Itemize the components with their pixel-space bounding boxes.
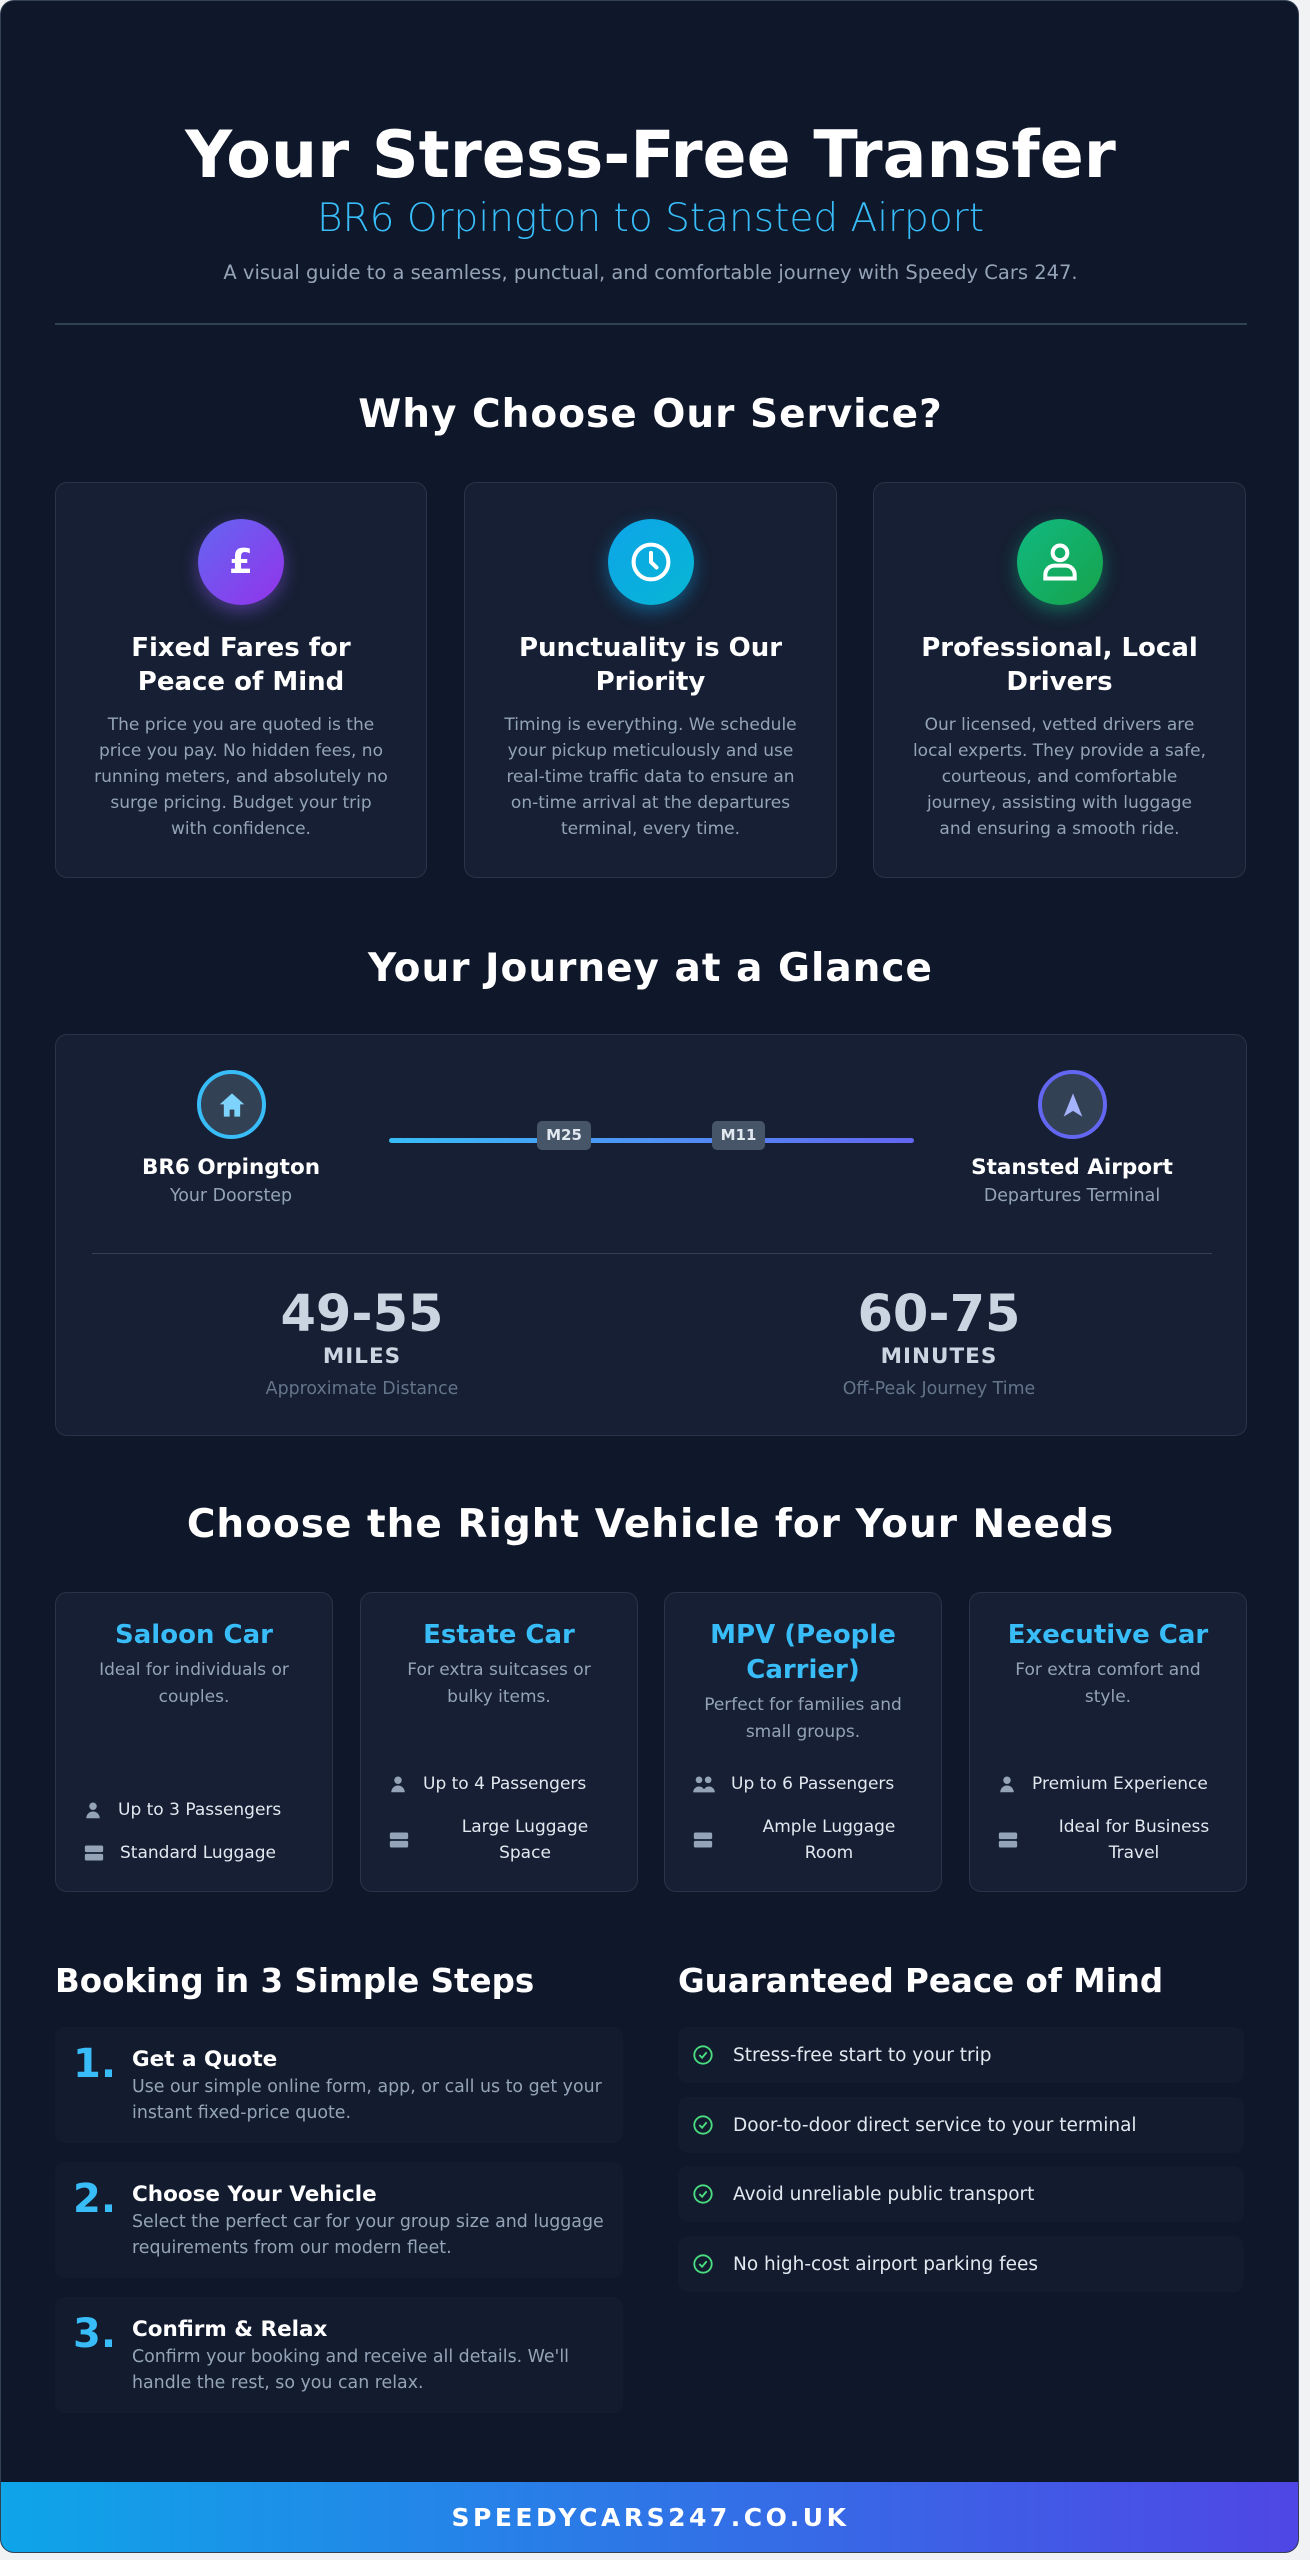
panel: estate xyxy=(360,1592,638,1892)
badge M11 xyxy=(712,1121,765,1150)
panel: mpv: MPV (People xyxy=(710,1620,896,1650)
feature: premium: Premium Experience xyxy=(1032,1774,1208,1794)
icon: person xyxy=(1016,519,1102,605)
stat: distance xyxy=(266,1285,458,1399)
feature: passengers: Up to 6 Passengers xyxy=(731,1774,894,1794)
benefit 4: No high-cost airport parking fees xyxy=(733,2254,1038,2274)
panel: punctuality xyxy=(464,482,837,878)
heading: vehicles: Choose the Right Vehicle for Your Needs xyxy=(187,1502,1114,1547)
stat: distance: MILES xyxy=(323,1344,401,1369)
icon: plane xyxy=(1038,1070,1107,1139)
feature: luggage xyxy=(390,1817,588,1863)
step 2: Select the perfect car for your group size and luggage requirements from our modern fleet. xyxy=(132,2212,604,2258)
stat: time: Off-Peak Journey Time xyxy=(843,1379,1035,1399)
step 2 xyxy=(55,2162,623,2278)
step 3: Confirm & Relax xyxy=(132,2317,327,2342)
benefit 2 xyxy=(678,2097,1244,2153)
benefit 3: Avoid unreliable public transport xyxy=(733,2184,1034,2204)
destination label: Stansted Airport xyxy=(971,1155,1173,1180)
stat: time: MINUTES xyxy=(881,1344,997,1369)
card title: Priority xyxy=(596,667,705,697)
footer: SPEEDYCARS247.CO.UK xyxy=(452,2503,849,2532)
benefit 2: Door-to-door direct service to your terminal xyxy=(733,2114,1137,2136)
feature: luggage: Large Luggage xyxy=(462,1817,588,1837)
feature: passengers: Up to 4 Passengers xyxy=(423,1774,586,1794)
stat: distance: Approximate Distance xyxy=(266,1379,458,1399)
feature: business: Ideal for Business xyxy=(1059,1817,1209,1837)
heading: booking: Booking in 3 Simple Steps xyxy=(55,1962,534,2000)
panel: executive: Executive Car xyxy=(1008,1620,1208,1650)
card title: Punctuality is Our xyxy=(519,633,782,663)
card title xyxy=(519,633,782,697)
panel: estate: For extra suitcases or bulky items. xyxy=(407,1660,591,1707)
panel: saloon xyxy=(55,1592,333,1892)
destination label: Departures Terminal xyxy=(984,1186,1160,1206)
stat: time: 60-75 xyxy=(857,1285,1021,1344)
feature: passengers: Up to 3 Passengers xyxy=(118,1800,281,1820)
feature: luggage: Ample Luggage xyxy=(763,1817,895,1837)
icon: pound xyxy=(198,519,284,605)
destination label xyxy=(971,1155,1173,1206)
panel: mpv: Carrier) xyxy=(746,1655,860,1685)
panel: journey xyxy=(55,1034,1247,1436)
panel: mpv xyxy=(664,1592,942,1892)
origin label: BR6 Orpington xyxy=(142,1155,320,1180)
card text: Timing is everything. We schedule your pickup meticulously and use real-time traffic data to ensure an on-time arrival at the departures terminal, every time. xyxy=(504,715,797,839)
icon: home xyxy=(197,1070,266,1139)
step 1: 1. xyxy=(73,2041,116,2087)
title: Your Stress-Free Transfer xyxy=(185,118,1116,193)
badge M25 xyxy=(537,1121,591,1150)
card title xyxy=(921,633,1198,697)
footer xyxy=(1,2482,1300,2554)
feature: luggage: Room xyxy=(805,1843,853,1863)
card title xyxy=(131,633,351,697)
panel: saloon: Ideal for individuals or couples. xyxy=(99,1660,289,1707)
step 3: 3. xyxy=(73,2311,116,2357)
panel: executive xyxy=(969,1592,1247,1892)
benefit 3 xyxy=(678,2166,1244,2222)
stat: distance: 49-55 xyxy=(280,1285,444,1344)
card title: Drivers xyxy=(1006,667,1113,697)
card text: Our licensed, vetted drivers are local experts. They provide a safe, courteous, and comfortable journey, assisting with luggage and ensuring a smooth ride. xyxy=(913,715,1206,839)
benefit 1 xyxy=(678,2027,1244,2083)
panel: mpv: Perfect for families and small groups. xyxy=(704,1695,902,1742)
benefit 1: Stress-free start to your trip xyxy=(733,2044,992,2066)
heading: journey: Your Journey at a Glance xyxy=(368,946,933,991)
badge M25: M25 xyxy=(546,1126,582,1144)
step 1: Get a Quote xyxy=(132,2047,277,2072)
step 1 xyxy=(55,2027,623,2143)
route line xyxy=(389,1138,914,1143)
step 2: 2. xyxy=(73,2176,116,2222)
benefit 4 xyxy=(678,2236,1244,2292)
subtitle: BR6 Orpington to Stansted Airport xyxy=(317,196,984,241)
icon: pound: £ xyxy=(229,542,253,582)
panel: drivers xyxy=(873,482,1246,878)
icon: clock xyxy=(608,519,694,605)
panel: fixed fares xyxy=(55,482,427,878)
feature: luggage xyxy=(694,1817,895,1863)
step 1: Use our simple online form, app, or call us to get your instant fixed-price quote. xyxy=(132,2077,602,2123)
card text: The price you are quoted is the price you pay. No hidden fees, no running meters, and absolutely no surge pricing. Budget your trip with confidence. xyxy=(94,715,388,839)
origin label: Your Doorstep xyxy=(170,1186,292,1206)
tagline: A visual guide to a seamless, punctual, and comfortable journey with Speedy Cars 247. xyxy=(223,261,1078,284)
origin label xyxy=(142,1155,320,1206)
card title: Peace of Mind xyxy=(138,667,344,697)
stat: time xyxy=(843,1285,1035,1399)
feature: luggage: Space xyxy=(499,1843,551,1863)
card title: Fixed Fares for xyxy=(131,633,351,663)
panel: saloon: Saloon Car xyxy=(115,1620,273,1650)
feature: business: Travel xyxy=(1109,1843,1159,1863)
heading: peace of mind: Guaranteed Peace of Mind xyxy=(678,1962,1163,2000)
feature: business xyxy=(998,1817,1209,1863)
heading: why choose: Why Choose Our Service? xyxy=(358,392,943,437)
step 3 xyxy=(55,2297,623,2413)
card title: Professional, Local xyxy=(921,633,1198,663)
badge M11: M11 xyxy=(721,1126,756,1144)
panel: executive: For extra comfort and style. xyxy=(1015,1660,1201,1707)
step 3: Confirm your booking and receive all details. We'll handle the rest, so you can relax. xyxy=(132,2347,569,2393)
feature: luggage: Standard Luggage xyxy=(120,1843,276,1863)
step 2: Choose Your Vehicle xyxy=(132,2182,377,2207)
panel: estate: Estate Car xyxy=(423,1620,575,1650)
